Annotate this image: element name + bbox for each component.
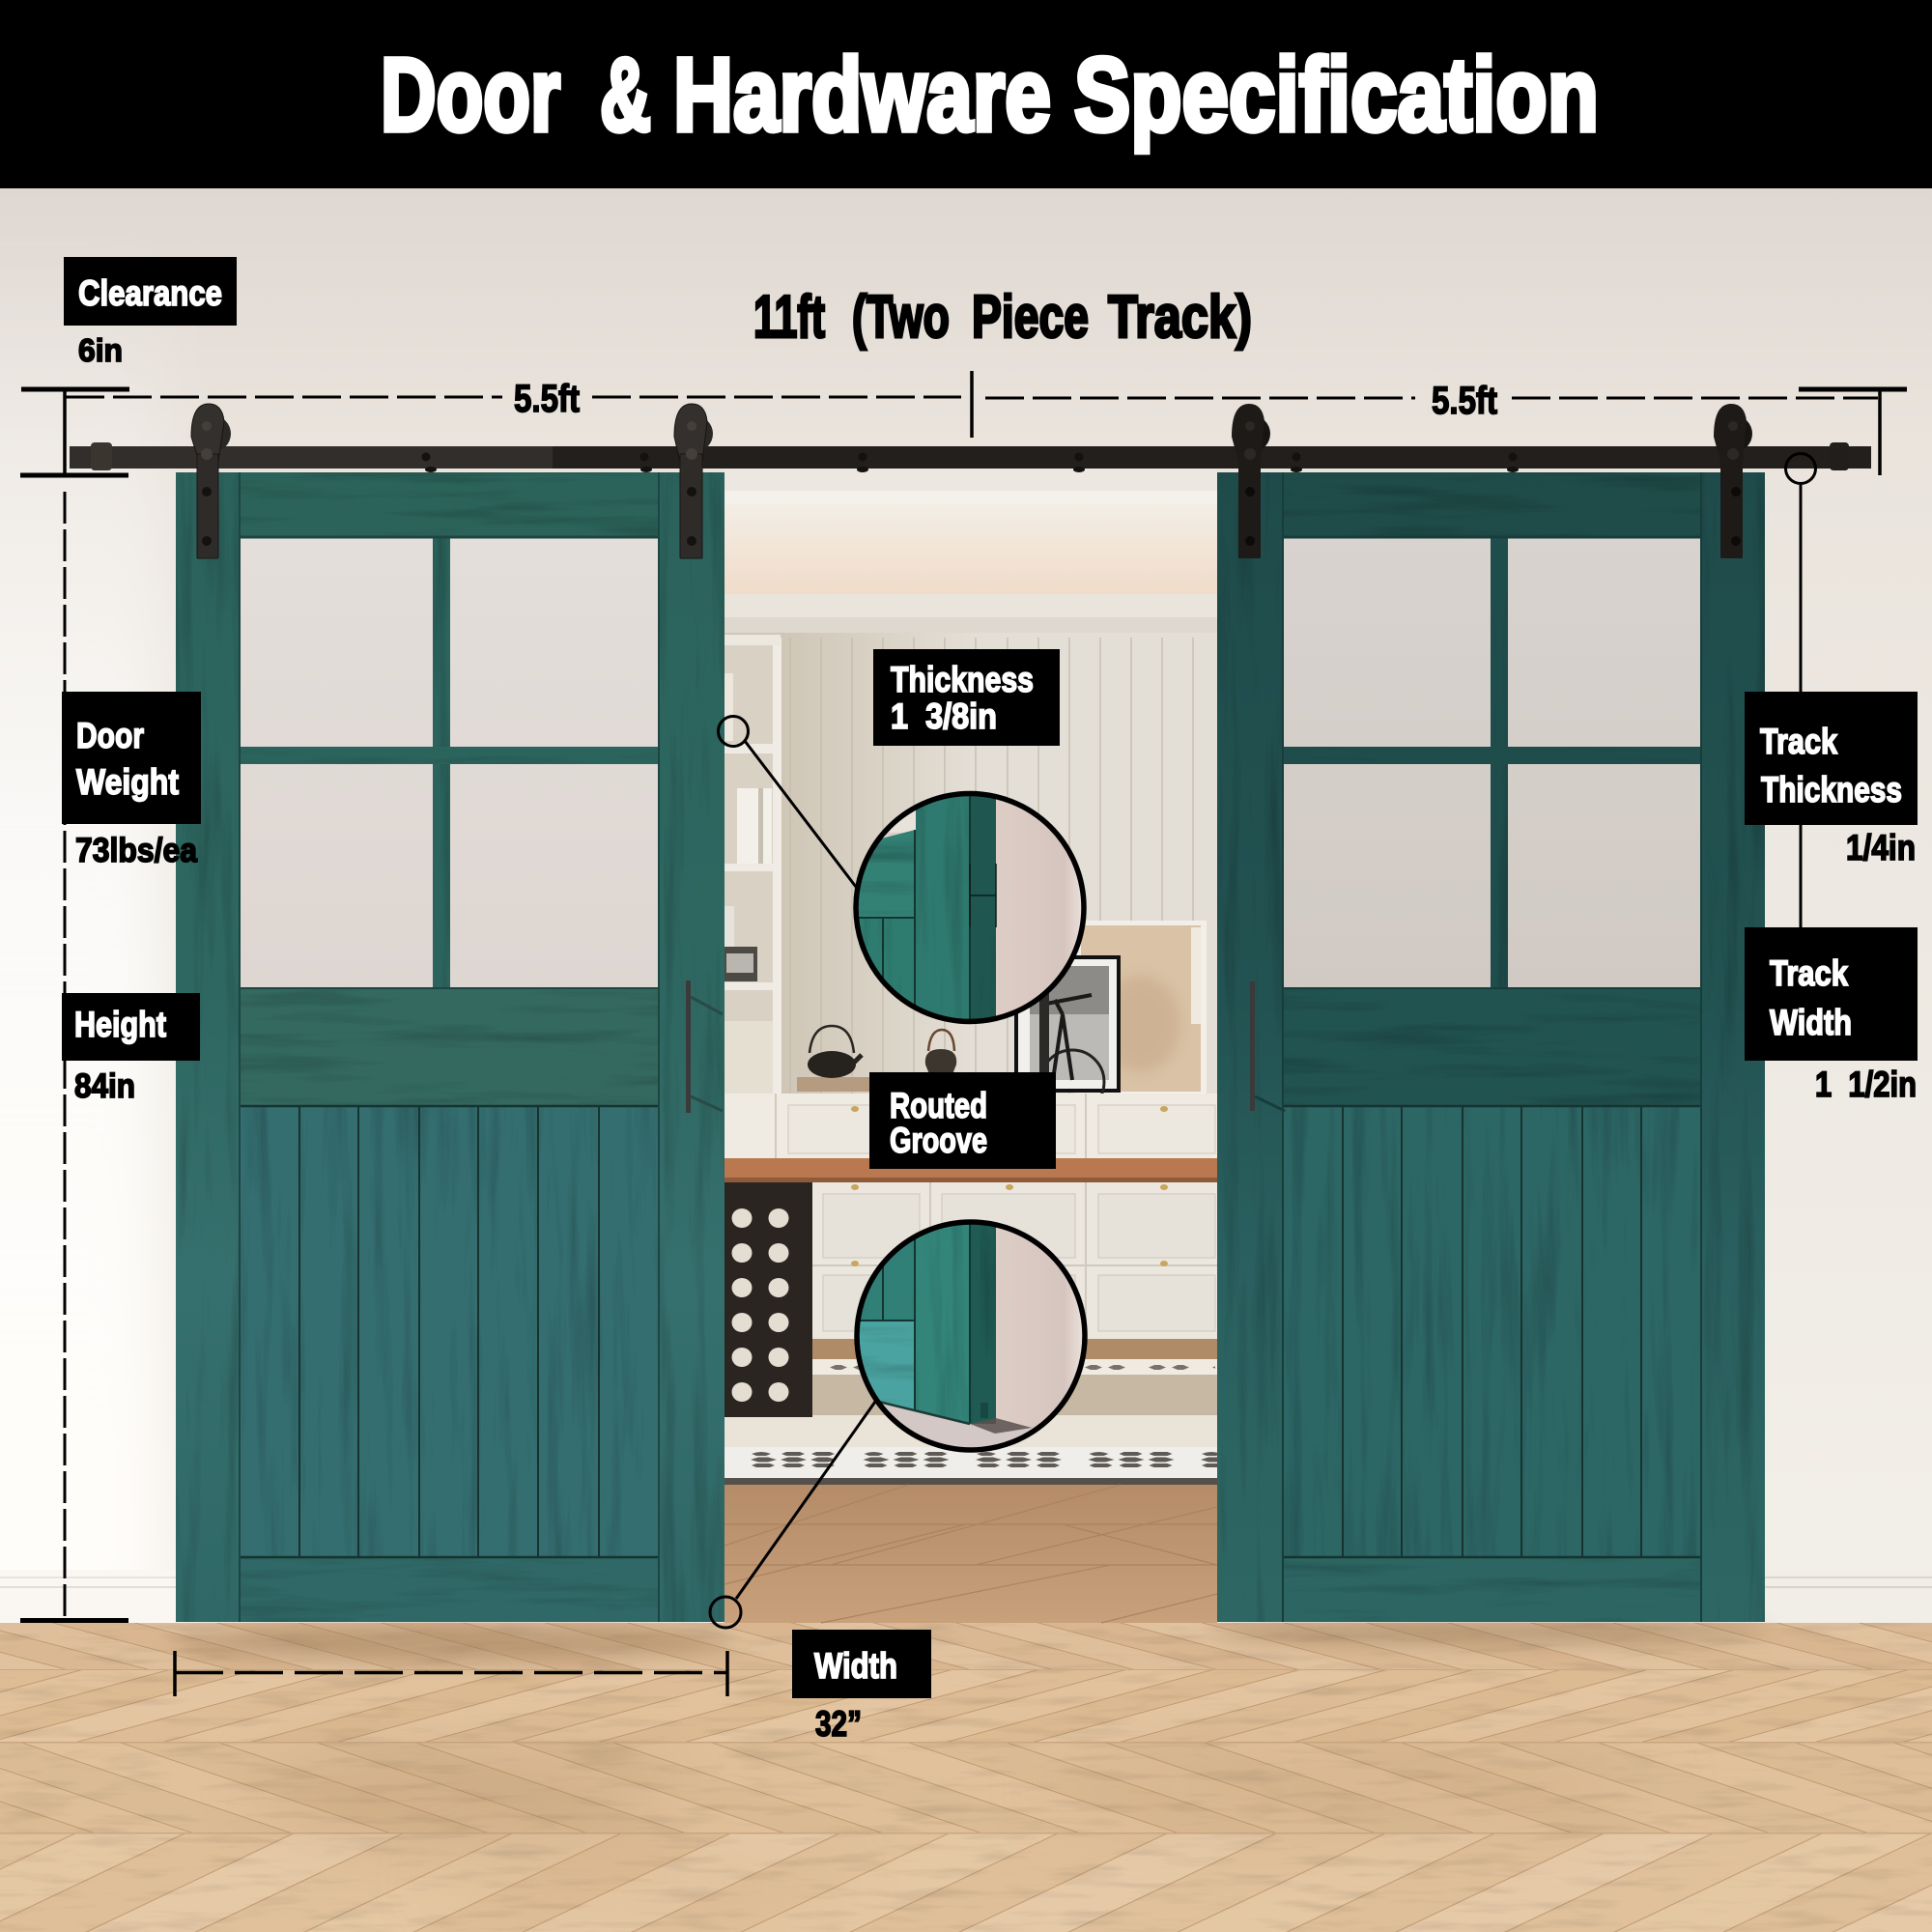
clearance bracket left	[20, 389, 129, 475]
vertical grain members	[1217, 472, 1765, 1622]
centre tick	[970, 371, 974, 438]
wood countertop	[724, 1158, 1217, 1182]
left bookshelf	[724, 635, 781, 1094]
roller hanger 2	[674, 404, 713, 558]
bottom magnifier: routed groove detail	[855, 1221, 1089, 1453]
height dimension line	[20, 492, 128, 1621]
callout: track width	[1745, 927, 1918, 1061]
value: door weight: 73lbs/ea	[75, 832, 197, 869]
value: width: 32”	[815, 1704, 862, 1744]
roller hanger 1	[191, 404, 231, 558]
plank grooves and edges	[1283, 472, 1701, 1622]
callout: thickness	[873, 649, 1060, 746]
track half length right: 5.5ft	[1432, 380, 1497, 422]
lower cabinets	[724, 1182, 1217, 1342]
callout: height: Height	[74, 1005, 166, 1044]
value: track thickness: 1/4in	[1846, 828, 1916, 867]
callout: door weight: Weight	[76, 762, 179, 802]
track length heading: (Two	[852, 284, 950, 351]
track dimension line right	[985, 396, 1878, 400]
left barn door	[176, 472, 724, 1622]
door pull handle	[1250, 981, 1285, 1111]
callout: thickness: Thickness	[891, 660, 1034, 699]
track length heading: 11ft	[753, 284, 825, 351]
glass panes	[240, 537, 659, 988]
cast iron kettles	[797, 1026, 956, 1092]
leader: thickness	[719, 717, 856, 887]
baseboards	[0, 1570, 1932, 1623]
callout: thickness: 1 3/8in	[891, 696, 997, 736]
callout: width	[792, 1630, 931, 1698]
upper cabinets	[724, 1094, 1217, 1158]
plank grooves and edges	[240, 472, 659, 1622]
right barn door	[1217, 472, 1765, 1622]
leader: track	[1785, 454, 1816, 927]
track length heading: Track)	[1108, 284, 1252, 351]
sliding track rail	[70, 442, 1871, 472]
callout: track thickness: Thickness	[1761, 770, 1902, 810]
door pull handle	[686, 980, 723, 1113]
rug and room floor	[724, 1339, 1217, 1623]
title: Door	[381, 36, 560, 153]
callout: height	[62, 993, 200, 1061]
roller hanger 4	[1714, 404, 1752, 558]
callout: track width: Track	[1770, 953, 1848, 993]
title: &	[600, 36, 651, 153]
chevron wood floor	[0, 1621, 1932, 1932]
beige canvas art	[1075, 921, 1207, 1094]
horizontal grain rails	[1283, 472, 1701, 1622]
track end stops	[91, 442, 1849, 470]
callout: routed groove: Routed	[890, 1086, 987, 1125]
leader: routed groove	[710, 1402, 875, 1628]
title: Hardware	[673, 36, 1051, 153]
room seen through opening	[724, 469, 1217, 1623]
callout: door weight	[62, 692, 201, 824]
callout: track width: Width	[1770, 1003, 1852, 1042]
callout: routed groove: Groove	[890, 1121, 987, 1160]
value: clearance: 6in	[78, 332, 123, 368]
black perforated table leg	[724, 1182, 812, 1417]
vertical grain members	[176, 472, 724, 1622]
track half length left: 5.5ft	[514, 378, 580, 420]
title	[381, 36, 1599, 153]
track dimension line left	[66, 396, 961, 398]
callout: clearance	[64, 257, 237, 326]
framed bicycle photo	[1014, 955, 1121, 1114]
ceiling and soffit	[724, 469, 1217, 637]
top magnifier: thickness detail	[855, 792, 1087, 1025]
glass panes	[1283, 537, 1701, 988]
horizontal grain rails	[240, 472, 659, 1622]
title: Specification	[1074, 36, 1599, 153]
paneled back wall	[724, 633, 1217, 1096]
door width dimension	[175, 1651, 727, 1696]
callout: track thickness	[1745, 692, 1918, 825]
title bar	[0, 0, 1932, 188]
callout: routed groove	[869, 1072, 1056, 1169]
value: height: 84in	[74, 1067, 135, 1105]
callout: track thickness: Track	[1760, 722, 1837, 761]
callout: door weight: Door	[76, 716, 144, 755]
roller hanger 3	[1232, 404, 1270, 558]
wall background	[0, 188, 1932, 1623]
callout: width: Width	[814, 1646, 897, 1686]
track length bracket right	[1799, 389, 1907, 475]
callout: clearance: Clearance	[78, 273, 222, 313]
track length heading: Piece	[972, 284, 1089, 351]
track length heading	[753, 284, 1252, 351]
